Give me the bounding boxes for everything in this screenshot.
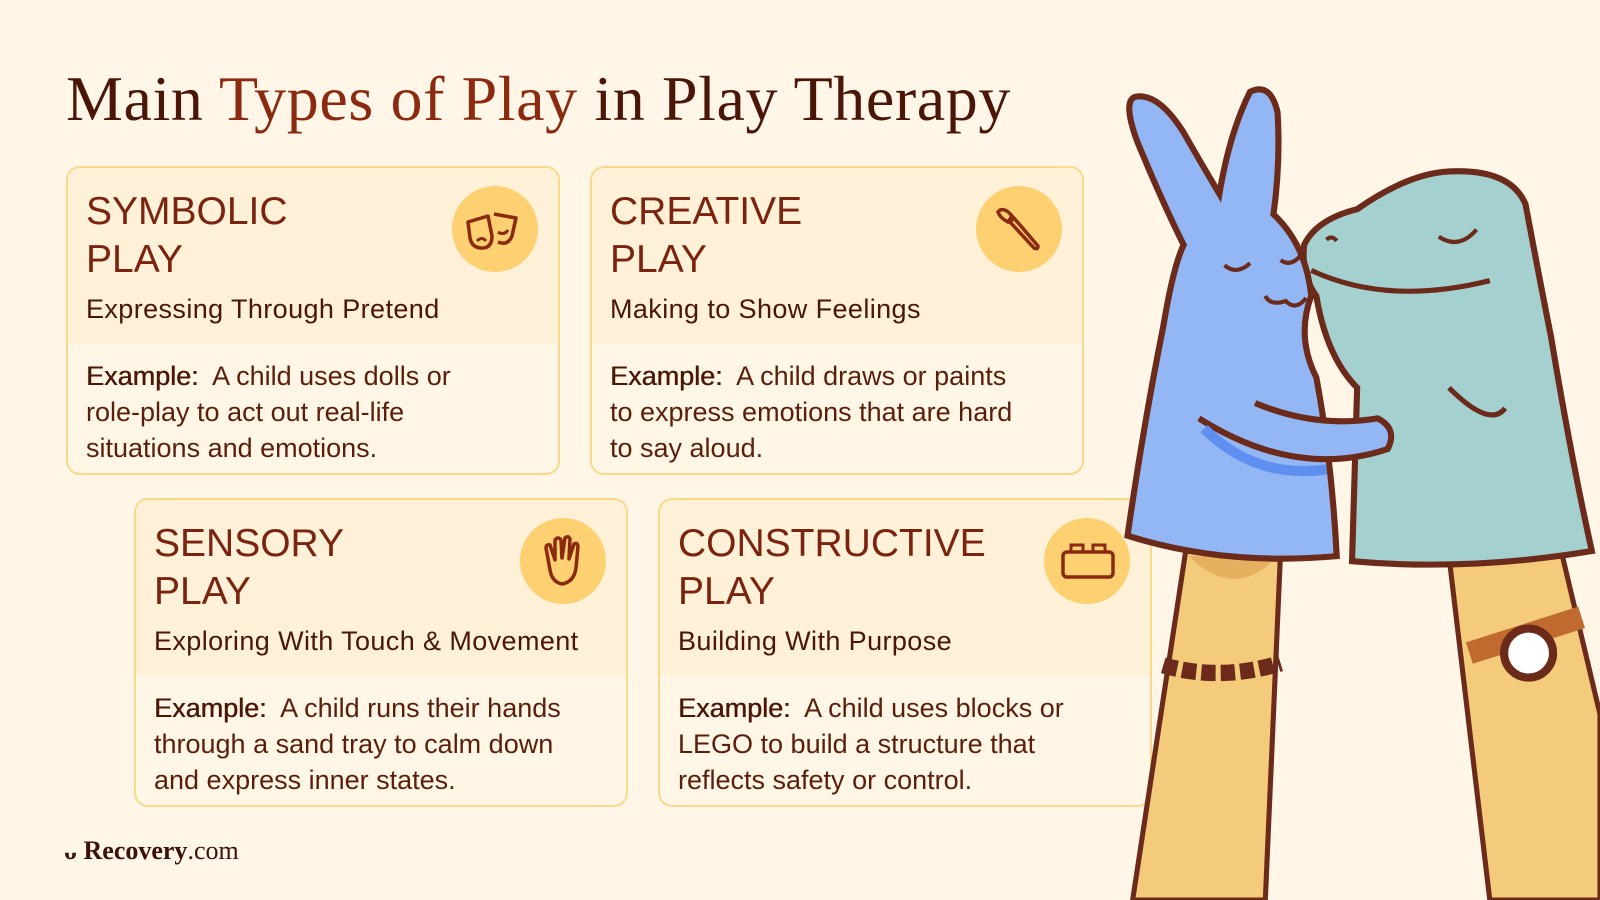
example: Example: A child draws or paints to express emotions that are hard to say aloud. (610, 361, 1012, 463)
heading: PLAY (610, 238, 707, 281)
arm left (1133, 551, 1281, 900)
heading: CONSTRUCTIVE (678, 522, 986, 565)
logo: ᴗ Recovery.com (64, 836, 239, 865)
icon: theater masks (452, 186, 538, 272)
heading (154, 522, 344, 613)
heading (678, 522, 986, 613)
heading: PLAY (678, 570, 775, 613)
subtitle: Exploring With Touch & Movement (154, 626, 579, 656)
subtitle: Making to Show Feelings (610, 294, 921, 324)
crocodile (1304, 171, 1592, 565)
title: Main Types of Play in Play Therapy (66, 63, 1011, 134)
icon: paintbrush (976, 186, 1062, 272)
icon: building block (1044, 518, 1130, 604)
heading: PLAY (154, 570, 251, 613)
example: Example: A child uses blocks or LEGO to build a structure that reflects safety or control. (678, 693, 1064, 795)
heading: SENSORY (154, 522, 344, 565)
heading (86, 190, 288, 281)
bunny (1128, 89, 1391, 559)
example: Example: A child uses dolls or role-play to act out real-life situations and emotions. (86, 361, 451, 463)
heading: CREATIVE (610, 190, 802, 233)
card: symbolic play (66, 166, 560, 475)
card: creative play (590, 166, 1084, 475)
heading (610, 190, 802, 281)
card: sensory play (134, 498, 628, 807)
heading: SYMBOLIC (86, 190, 288, 233)
heading: PLAY (86, 238, 183, 281)
subtitle: Expressing Through Pretend (86, 294, 440, 324)
icon: hand (520, 518, 606, 604)
example: Example: A child runs their hands through a sand tray to calm down and express inner states. (154, 693, 561, 795)
card: constructive play (658, 498, 1152, 807)
subtitle: Building With Purpose (678, 626, 952, 656)
arm right (1449, 551, 1600, 900)
